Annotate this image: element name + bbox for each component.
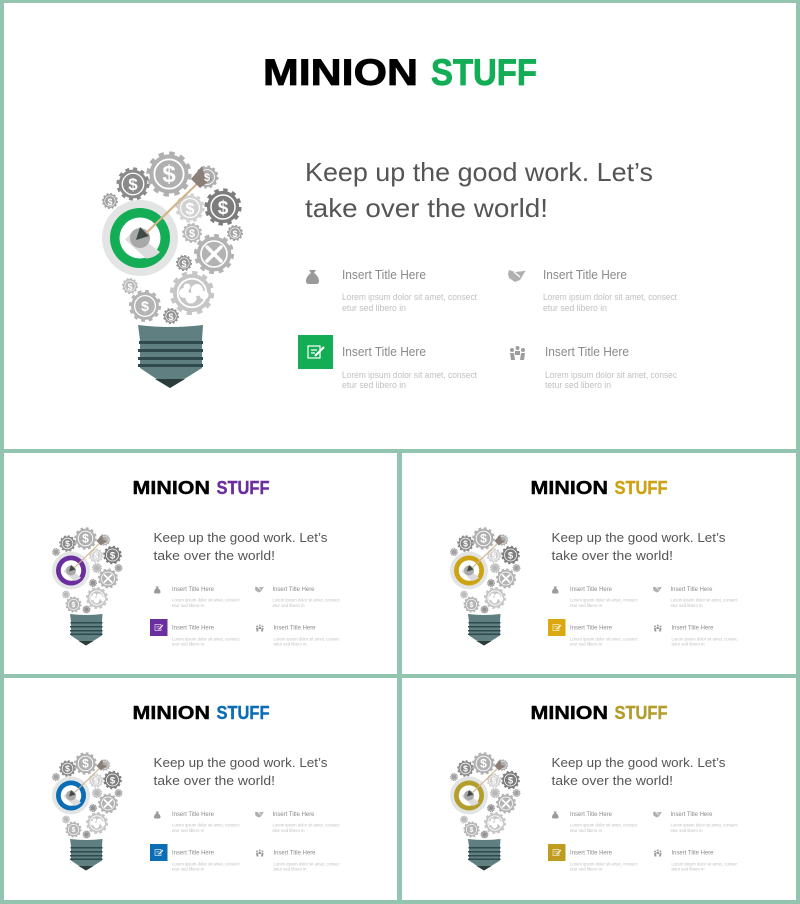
item: team: tetur sed libero in (672, 642, 705, 646)
item: handshake: etur sed libero in (272, 828, 305, 833)
title: MINION (132, 477, 210, 498)
lightbulb of gears with target: $ (508, 776, 514, 786)
item: handshake: Insert Title Here (543, 268, 627, 282)
title (530, 702, 668, 723)
panel: blue slide (4, 678, 397, 900)
item: team: Insert Title Here (672, 624, 714, 632)
item: money bag: etur sed libero in (172, 603, 204, 608)
item: team: Lorem ipsum dolor sit amet, consec (672, 636, 738, 642)
lightbulb of gears with target: $ (72, 827, 76, 834)
lightbulb of gears with target: $ (470, 827, 474, 834)
item: team (256, 624, 340, 646)
item: highlighted pen (548, 619, 638, 646)
panel: purple slide (4, 453, 397, 674)
lightbulb of gears with target: $ (94, 776, 99, 786)
lightbulb of gears with target: $ (480, 756, 487, 770)
item: highlighted pen: Lorem ipsum dolor sit amet, consect (172, 636, 240, 642)
item: team (654, 850, 738, 872)
lightbulb of gears with target: $ (94, 552, 99, 560)
title (530, 477, 668, 498)
title (132, 477, 270, 498)
title: STUFF (216, 702, 270, 723)
item: highlighted pen: Insert Title Here (342, 345, 426, 359)
item: highlighted pen: etur sed libero in (570, 642, 602, 646)
lightbulb of gears with target: $ (72, 602, 76, 609)
lightbulb of gears with target: $ (181, 259, 187, 269)
item: highlighted pen: etur sed libero in (172, 866, 204, 872)
item: money bag: Lorem ipsum dolor sit amet, consect (570, 598, 638, 602)
item: money bag (552, 811, 638, 833)
item: money bag: Insert Title Here (172, 811, 214, 818)
item: money bag: Lorem ipsum dolor sit amet, consect (172, 598, 240, 602)
item: handshake: Lorem ipsum dolor sit amet, consect (670, 822, 738, 828)
item: money bag: Insert Title Here (342, 268, 426, 282)
item: handshake: Lorem ipsum dolor sit amet, consect (670, 598, 738, 602)
item: highlighted pen: Lorem ipsum dolor sit amet, consect (570, 862, 638, 866)
item: handshake (653, 811, 738, 833)
item: handshake: etur sed libero in (543, 303, 607, 313)
panel: gold slide (402, 453, 796, 674)
item: money bag: Insert Title Here (570, 586, 612, 593)
item: team (510, 345, 677, 390)
heading: Keep up the good work. Let’s (552, 755, 726, 770)
item: handshake (255, 811, 340, 833)
item: highlighted pen: etur sed libero in (172, 642, 204, 646)
lightbulb of gears with target: $ (186, 201, 195, 218)
heading (552, 755, 726, 788)
item: handshake: etur sed libero in (670, 603, 703, 608)
lightbulb of gears with target: $ (463, 764, 468, 774)
item: money bag: etur sed libero in (172, 828, 204, 833)
item: highlighted pen: Lorem ipsum dolor sit amet, consect (172, 862, 240, 866)
item: highlighted pen: Insert Title Here (570, 850, 612, 856)
item: money bag (306, 268, 477, 313)
item: team: Insert Title Here (274, 850, 316, 856)
heading: take over the world! (154, 548, 275, 563)
item: money bag: Lorem ipsum dolor sit amet, consect (570, 822, 638, 828)
lightbulb of gears with target: $ (508, 550, 514, 562)
lightbulb of gears with target: $ (128, 175, 138, 194)
item: money bag: etur sed libero in (342, 303, 406, 313)
item: team: Lorem ipsum dolor sit amet, consec (274, 636, 340, 642)
item: handshake: Insert Title Here (272, 811, 315, 818)
title: STUFF (614, 702, 668, 723)
lightbulb of gears with target: $ (480, 532, 487, 546)
lightbulb of gears with target: $ (65, 538, 70, 548)
panel: olive slide (402, 678, 796, 900)
item: handshake: etur sed libero in (272, 603, 305, 608)
lightbulb of gears with target (450, 528, 520, 646)
item: team: Insert Title Here (545, 345, 629, 359)
lightbulb of gears with target: $ (82, 532, 89, 546)
item: money bag: Lorem ipsum dolor sit amet, consect (342, 292, 477, 302)
item: team: Insert Title Here (274, 624, 316, 632)
lightbulb of gears with target: $ (107, 197, 113, 207)
item: money bag (154, 586, 240, 608)
title: MINION (530, 477, 608, 498)
title: MINION (132, 702, 210, 723)
item: handshake (653, 586, 738, 608)
item: money bag (552, 586, 638, 608)
item: team: Lorem ipsum dolor sit amet, consec (274, 862, 340, 866)
heading (552, 530, 726, 563)
item: money bag: Insert Title Here (570, 811, 612, 818)
title: STUFF (431, 52, 537, 93)
item: team (256, 850, 340, 872)
lightbulb of gears with target: $ (82, 756, 89, 770)
title (132, 702, 270, 723)
item: highlighted pen: Lorem ipsum dolor sit amet, consect (570, 636, 638, 642)
heading: take over the world! (552, 548, 673, 563)
item: handshake: Lorem ipsum dolor sit amet, consect (272, 822, 340, 828)
item: handshake: Lorem ipsum dolor sit amet, consect (272, 598, 340, 602)
lightbulb of gears with target (102, 153, 242, 388)
item: team: tetur sed libero in (672, 866, 705, 872)
item: money bag (154, 811, 240, 833)
lightbulb of gears with target: $ (65, 764, 70, 774)
lightbulb of gears with target: $ (218, 198, 229, 219)
item: money bag: Insert Title Here (172, 586, 214, 593)
title: STUFF (216, 477, 270, 498)
item: highlighted pen: etur sed libero in (342, 380, 406, 390)
item: handshake (508, 268, 677, 313)
item: highlighted pen: etur sed libero in (570, 866, 602, 872)
item: handshake: Lorem ipsum dolor sit amet, consect (543, 292, 677, 302)
title (263, 52, 537, 93)
heading: Keep up the good work. Let’s (305, 157, 653, 187)
item: highlighted pen (150, 619, 240, 646)
item: highlighted pen: Insert Title Here (172, 850, 214, 856)
title: STUFF (614, 477, 668, 498)
lightbulb of gears with target (450, 753, 520, 870)
item: handshake: Insert Title Here (670, 811, 713, 818)
lightbulb of gears with target: $ (463, 538, 468, 548)
lightbulb of gears with target: $ (127, 282, 133, 292)
lightbulb of gears with target: $ (162, 161, 176, 188)
lightbulb of gears with target: $ (141, 298, 149, 314)
item: handshake (255, 586, 340, 608)
item: highlighted pen: Insert Title Here (172, 624, 214, 632)
item: team: Lorem ipsum dolor sit amet, consec (545, 370, 677, 380)
lightbulb of gears with target: $ (204, 172, 210, 184)
item: team: tetur sed libero in (274, 642, 307, 646)
heading: Keep up the good work. Let’s (552, 530, 726, 545)
heading: Keep up the good work. Let’s (154, 530, 328, 545)
item: team: Lorem ipsum dolor sit amet, consec (672, 862, 738, 866)
heading (305, 157, 653, 223)
item: highlighted pen (150, 844, 240, 872)
item: money bag: etur sed libero in (570, 603, 602, 608)
item: highlighted pen: Lorem ipsum dolor sit amet, consect (342, 370, 477, 380)
item: handshake: Insert Title Here (272, 586, 315, 593)
lightbulb of gears with target: $ (110, 550, 116, 562)
panel: main green slide (4, 3, 796, 449)
item: highlighted pen: Insert Title Here (570, 624, 612, 632)
heading (154, 755, 328, 788)
lightbulb of gears with target (52, 528, 122, 646)
title: MINION (530, 702, 608, 723)
item: team (654, 624, 738, 646)
heading (154, 530, 328, 563)
heading: take over the world! (552, 773, 673, 788)
lightbulb of gears with target: $ (232, 229, 238, 239)
heading: take over the world! (305, 193, 548, 223)
item: money bag: etur sed libero in (570, 828, 602, 833)
lightbulb of gears with target: $ (492, 776, 497, 786)
lightbulb of gears with target: $ (110, 776, 116, 786)
lightbulb of gears with target: $ (168, 312, 174, 322)
lightbulb of gears with target: $ (470, 602, 474, 609)
heading: take over the world! (154, 773, 275, 788)
item: handshake: etur sed libero in (670, 828, 703, 833)
heading: Keep up the good work. Let’s (154, 755, 328, 770)
item: highlighted pen (298, 335, 477, 390)
lightbulb of gears with target: $ (492, 552, 497, 560)
item: team: tetur sed libero in (274, 866, 307, 872)
item: team: tetur sed libero in (545, 380, 611, 390)
lightbulb of gears with target (52, 753, 122, 870)
title: MINION (263, 52, 418, 93)
item: highlighted pen (548, 844, 638, 872)
lightbulb of gears with target: $ (189, 228, 195, 240)
item: team: Insert Title Here (672, 850, 714, 856)
item: handshake: Insert Title Here (670, 586, 713, 593)
item: money bag: Lorem ipsum dolor sit amet, consect (172, 822, 240, 828)
